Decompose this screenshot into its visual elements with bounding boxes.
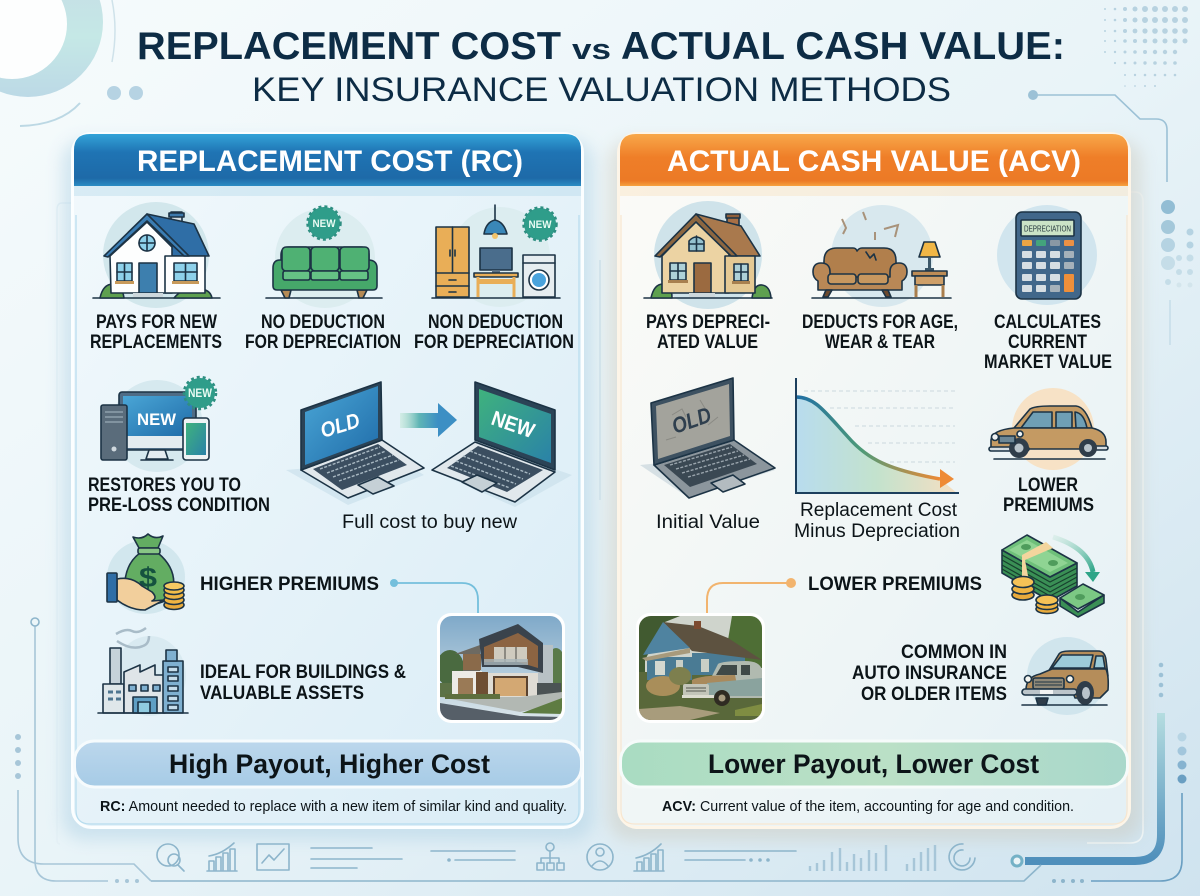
icon: old laptop: OLD <box>318 409 363 443</box>
label: PAYS DEPRECI- <box>646 312 770 333</box>
icon: old laptop <box>286 382 424 505</box>
icon: older tan car <box>989 388 1108 470</box>
icon: cash stacks and coins <box>1002 535 1104 617</box>
photo: old house and rusty car <box>636 613 765 723</box>
caption: Initial Value <box>656 512 760 533</box>
summary bar: high payout <box>74 741 582 787</box>
icon: old worn laptop <box>640 378 775 498</box>
label: PREMIUMS <box>1003 495 1094 516</box>
title <box>137 25 1065 109</box>
label: CALCULATES <box>994 312 1101 333</box>
decorative dot grid top-right <box>1104 6 1188 87</box>
icon: new computer and phone: NEW <box>137 410 177 429</box>
summary bar: lower payout <box>620 741 1128 787</box>
label: LOWER <box>1018 475 1078 496</box>
arrow: old to new <box>400 403 457 437</box>
label: OR OLDER ITEMS <box>861 684 1007 705</box>
label: MARKET VALUE <box>984 352 1112 373</box>
label: COMMON IN <box>901 642 1007 663</box>
icon: older car front view <box>1022 637 1108 715</box>
connector to old house photo <box>707 578 796 613</box>
icon: depreciation calculator: DEPRECIATION <box>1024 224 1071 234</box>
label <box>200 662 406 704</box>
photo: modern house <box>436 613 566 723</box>
label: FOR DEPRECIATION <box>245 332 401 353</box>
icon: money bag in hand: $ <box>139 562 157 593</box>
label: NON DEDUCTION <box>428 312 563 333</box>
label: FOR DEPRECIATION <box>414 332 574 353</box>
RC header <box>74 134 581 196</box>
label: REPLACEMENTS <box>90 332 222 353</box>
connector to modern house photo <box>390 579 478 613</box>
icon: new laptop: NEW <box>488 407 538 443</box>
caption <box>794 500 960 542</box>
label <box>90 312 222 353</box>
label <box>414 312 574 353</box>
panel: replacement cost <box>62 134 594 840</box>
label <box>984 312 1112 373</box>
label: LOWER PREMIUMS <box>808 574 982 595</box>
label: WEAR & TEAR <box>825 332 935 353</box>
title: ACTUAL CASH VALUE: <box>621 25 1065 68</box>
label: PRE-LOSS CONDITION <box>88 495 270 516</box>
label: HIGHER PREMIUMS <box>200 574 379 595</box>
label: IDEAL FOR BUILDINGS & <box>200 662 406 683</box>
title: vs <box>572 34 611 66</box>
label <box>802 312 958 353</box>
ACV header <box>620 134 1128 196</box>
icon: worn sofa and lamp <box>812 205 951 307</box>
icon: depreciation calculator <box>997 205 1097 305</box>
ACV header: ACTUAL CASH VALUE (ACV) <box>667 145 1081 178</box>
label <box>88 475 270 516</box>
RC header: REPLACEMENT COST (RC) <box>137 145 523 178</box>
title: KEY INSURANCE VALUATION METHODS <box>252 71 951 109</box>
panel: actual cash value <box>608 134 1142 840</box>
icon: new sofa: NEW <box>312 218 336 230</box>
icon: new computer and phone <box>101 377 216 472</box>
label: VALUABLE ASSETS <box>200 683 364 704</box>
summary bar: high payout: High Payout, Higher Cost <box>169 749 490 779</box>
icon: old worn laptop: OLD <box>668 402 715 439</box>
icon: new computer and phone: NEW <box>188 388 212 400</box>
label: PAYS FOR NEW <box>96 312 217 333</box>
definition: RC: RC: Amount needed to replace with a new item of similar kind and quality. <box>100 798 567 815</box>
label: CURRENT <box>1008 332 1087 353</box>
icon: factory <box>98 628 188 716</box>
summary bar: lower payout: Lower Payout, Lower Cost <box>708 749 1039 779</box>
caption: Minus Depreciation <box>794 521 960 542</box>
title: REPLACEMENT COST <box>137 25 561 68</box>
icon: money bag in hand <box>107 534 185 614</box>
label: NO DEDUCTION <box>261 312 385 333</box>
label: RESTORES YOU TO <box>88 475 241 496</box>
caption: Replacement Cost <box>800 500 958 521</box>
caption: Full cost to buy new <box>342 512 517 533</box>
icon: new sofa <box>266 206 382 308</box>
label: ATED VALUE <box>657 332 758 353</box>
label <box>1003 475 1094 516</box>
label: DEDUCTS FOR AGE, <box>802 312 958 333</box>
definition: ACV: ACV: Current value of the item, accounting for age and condition. <box>662 798 1074 815</box>
icon: new house <box>93 202 220 308</box>
depreciation chart <box>796 378 959 493</box>
icon: new laptop <box>432 382 572 507</box>
icon: new furniture and appliances: NEW <box>528 219 552 231</box>
icon: new furniture and appliances <box>432 205 560 307</box>
label: AUTO INSURANCE <box>852 663 1007 684</box>
label <box>646 312 770 353</box>
footer decorative icon strip <box>157 843 975 871</box>
decorative top-left rings <box>0 0 143 126</box>
label <box>852 642 1007 705</box>
label <box>245 312 401 353</box>
icon: aged house <box>644 201 772 309</box>
